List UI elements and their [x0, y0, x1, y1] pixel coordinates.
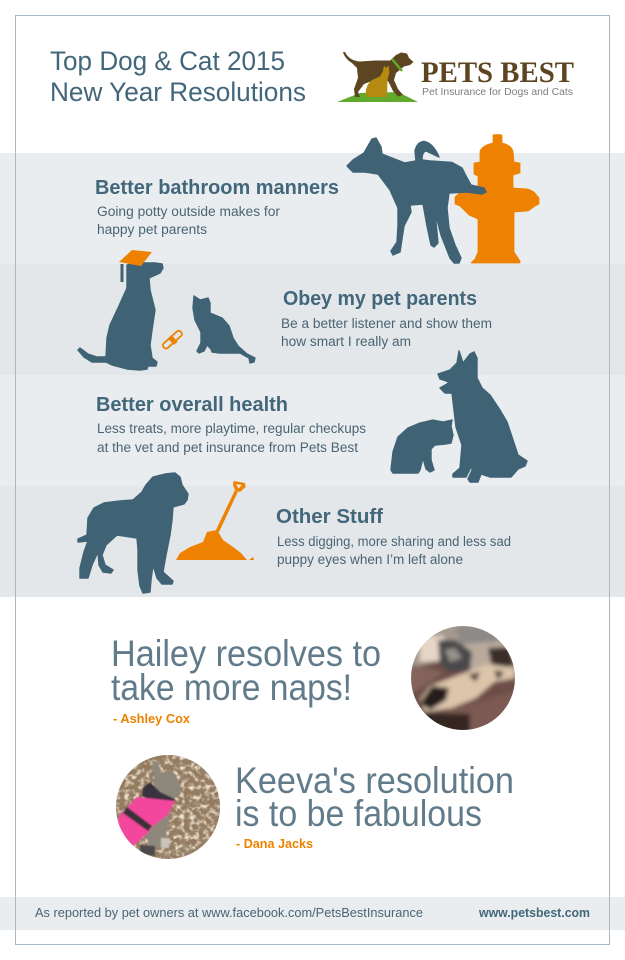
text block: Less treats, more playtime, regular checkups [97, 421, 366, 436]
icon: mastiff dog [78, 473, 188, 593]
panel: obey my pet parents [78, 250, 492, 370]
text block [97, 204, 281, 237]
website: www.petsbest.com [478, 905, 590, 920]
icon: logo cat [366, 66, 390, 97]
icon: grass [337, 92, 418, 102]
icon: cat licking paw [391, 420, 453, 473]
photo: sleeping dog and cat [411, 626, 515, 730]
text block: puppy eyes when I’m left alone [277, 552, 463, 567]
logo: Pets Best [337, 52, 574, 102]
attribution: - Dana Jacks [236, 836, 313, 851]
photo: dog in pink coat [115, 754, 221, 860]
text block: at the vet and pet insurance from Pets Best [97, 440, 358, 455]
quote text: Keeva's resolution [235, 760, 514, 801]
attribution: - Ashley Cox [113, 711, 191, 726]
panel: better bathroom manners [95, 134, 539, 263]
icon: diploma [161, 329, 184, 351]
icon: dog at hydrant [347, 138, 486, 263]
quote text: take more naps! [111, 667, 352, 708]
title [50, 46, 306, 107]
panel: band 2 background [0, 264, 625, 375]
panel: better overall health [96, 351, 527, 482]
panel: Keeva quote [115, 754, 514, 860]
panel: band 4 background [0, 486, 625, 597]
text block: Going potty outside makes for [97, 204, 281, 219]
text block [97, 421, 366, 455]
text block: happy pet parents [97, 222, 207, 237]
logo tagline: Pet Insurance for Dogs and Cats [422, 87, 573, 98]
text block: Less digging, more sharing and less sad [277, 534, 511, 549]
panel: other stuff [78, 473, 511, 593]
heading: Other Stuff [276, 506, 383, 528]
text block [281, 316, 492, 349]
icon: logo dog [343, 52, 414, 97]
heading: Better bathroom manners [95, 177, 339, 199]
icon: graduation cap [119, 250, 152, 282]
title: New Year Resolutions [50, 77, 306, 107]
text block: how smart I really am [281, 334, 411, 349]
icon: shovel and dirt [176, 481, 254, 560]
panel: band 3 background [0, 375, 625, 486]
quote text: Hailey resolves to [111, 633, 381, 674]
logo wordmark: PETS BEST [421, 56, 574, 89]
quote text [111, 633, 381, 708]
icon: german shepherd [438, 351, 527, 482]
icon: fire hydrant [455, 134, 539, 263]
icon: dog collar [392, 59, 402, 71]
heading: Obey my pet parents [283, 288, 477, 310]
footer [35, 905, 590, 920]
heading: Better overall health [96, 394, 288, 416]
panel: band 1 background [0, 153, 625, 264]
source note: As reported by pet owners at www.facebook.com/PetsBestInsurance [35, 905, 423, 920]
quote text: is to be fabulous [235, 793, 482, 834]
panel: footer band [0, 897, 625, 930]
title: Top Dog & Cat 2015 [50, 46, 285, 76]
icon: cat [193, 296, 255, 363]
text block [277, 534, 511, 567]
icon: dog with cap [78, 263, 163, 370]
text block: Be a better listener and show them [281, 316, 492, 331]
quote text [235, 760, 514, 834]
panel: Hailey quote [111, 622, 518, 734]
